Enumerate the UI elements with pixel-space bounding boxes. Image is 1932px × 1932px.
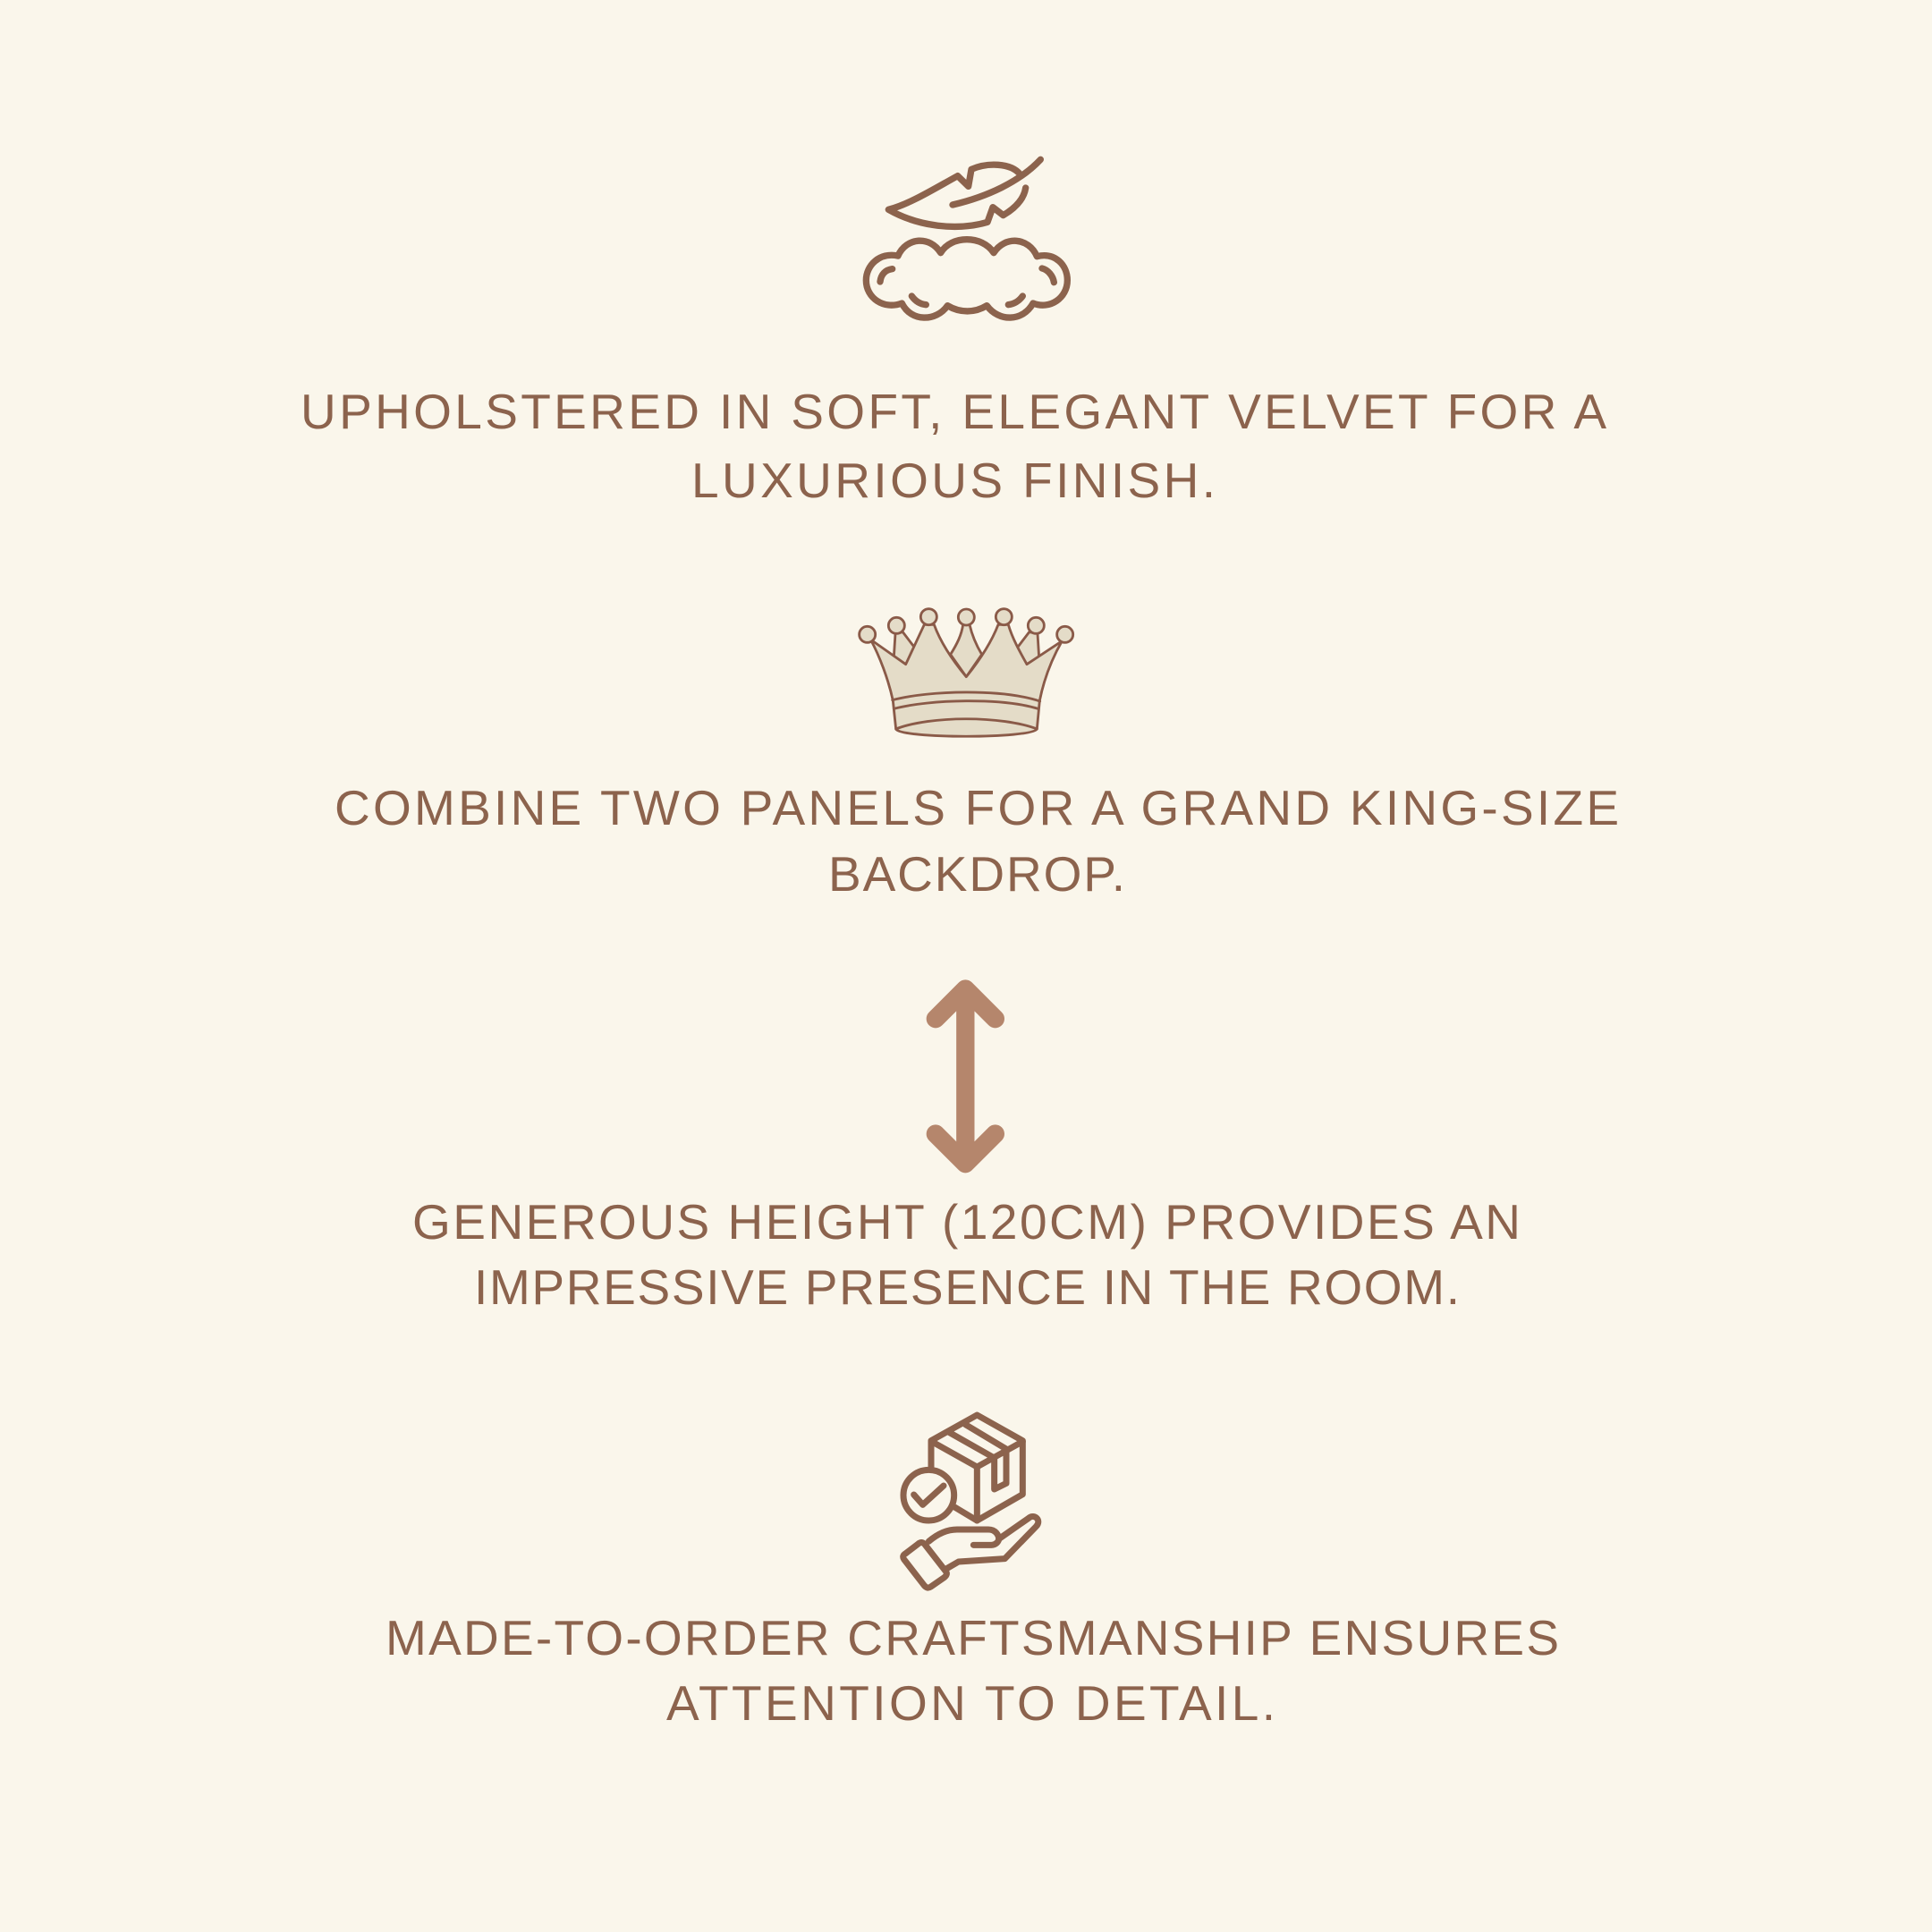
icon: crown — [860, 609, 1073, 736]
text: king-size backdrop — [335, 780, 1619, 902]
text: velvet upholstery: LUXURIOUS FINISH. — [691, 453, 1216, 508]
text: made-to-order craftsmanship: MADE-TO-ORDER CRAFTSMANSHIP ENSURES — [386, 1610, 1559, 1665]
text: made-to-order craftsmanship — [386, 1610, 1559, 1731]
text: velvet upholstery — [301, 384, 1606, 508]
text: king-size backdrop: BACKDROP. — [828, 846, 1125, 902]
icon: feather above cloud — [866, 159, 1067, 318]
icon: box with check held on hand — [903, 1415, 1038, 1588]
text: generous height — [412, 1194, 1521, 1315]
text: made-to-order craftsmanship: ATTENTION TO DETAIL. — [666, 1675, 1275, 1731]
icon: double-headed height arrow — [936, 989, 996, 1164]
text: king-size backdrop: COMBINE TWO PANELS FOR A GRAND KING-SIZE — [335, 780, 1619, 835]
text: velvet upholstery: UPHOLSTERED IN SOFT, ELEGANT VELVET FOR A — [301, 384, 1606, 439]
text: generous height: GENEROUS HEIGHT (120CM) PROVIDES AN — [412, 1194, 1521, 1250]
text: generous height: IMPRESSIVE PRESENCE IN THE ROOM. — [474, 1259, 1460, 1315]
